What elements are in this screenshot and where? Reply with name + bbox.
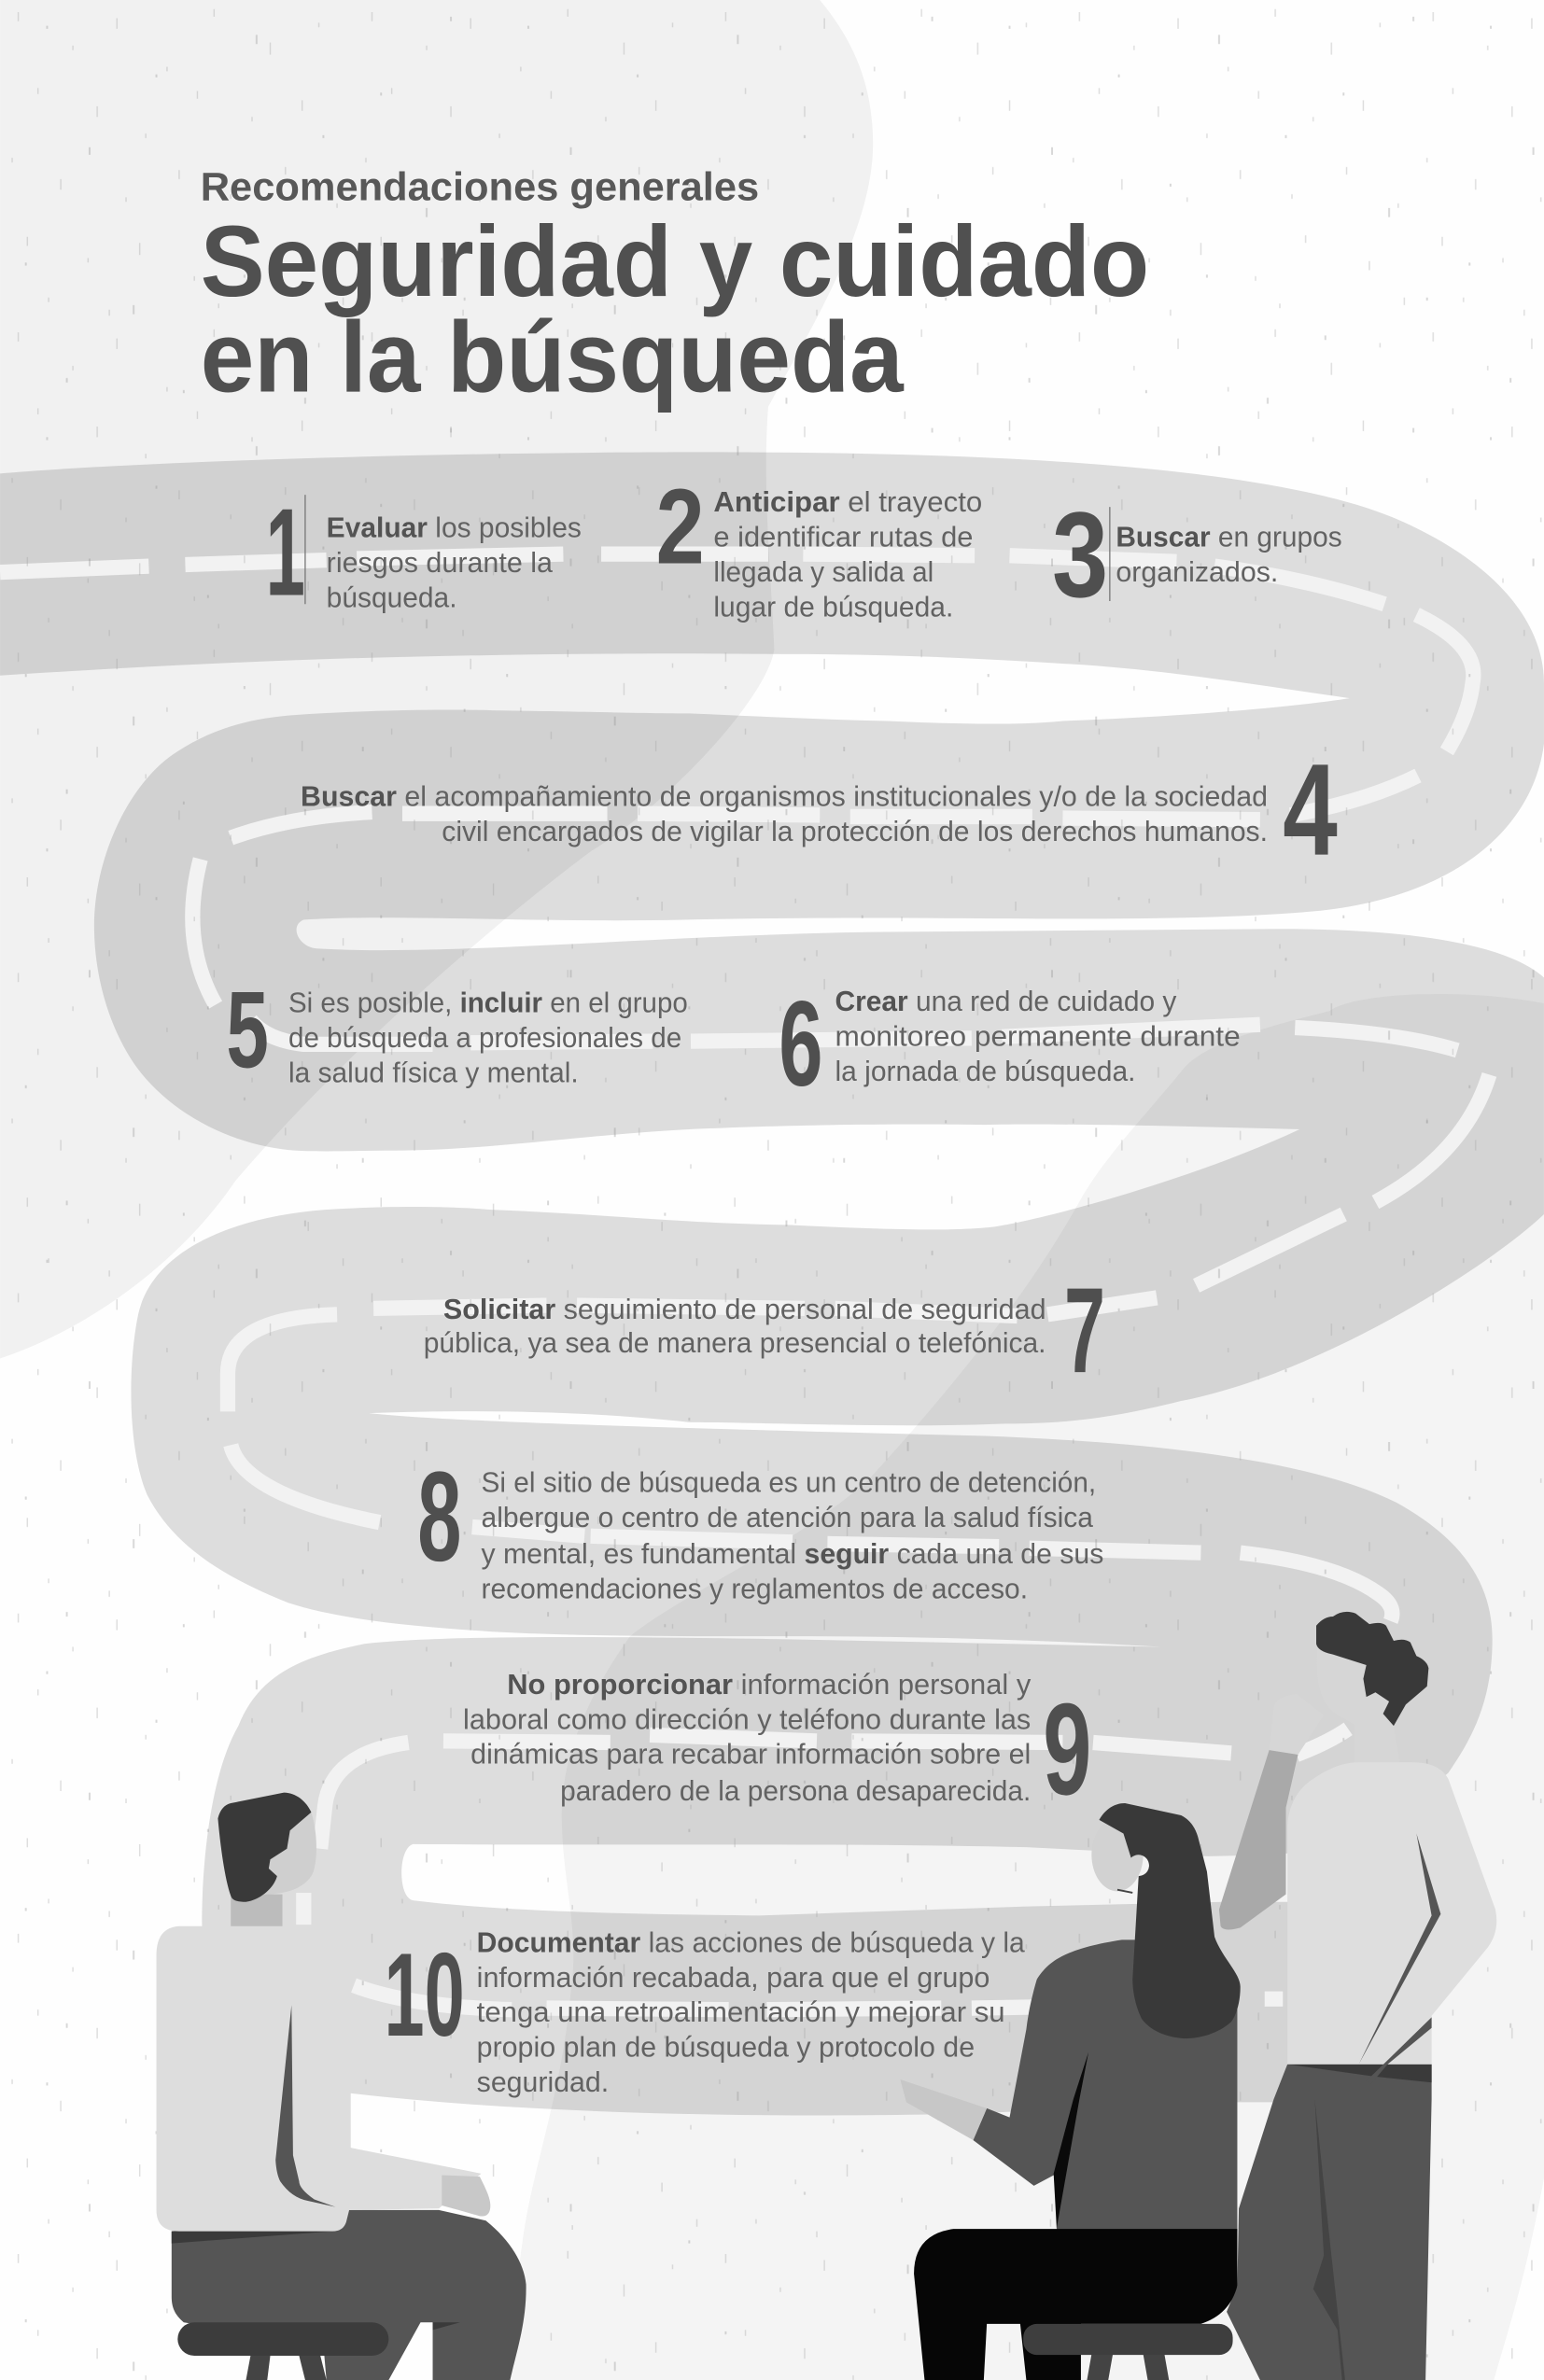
stool legs <box>1087 2354 1169 2380</box>
text 2: llegada y salida al <box>713 557 933 588</box>
number 4: 4 <box>1283 736 1338 883</box>
text 3 <box>1116 522 1342 588</box>
text 5: la salud física y mental. <box>288 1058 579 1089</box>
text 8: y mental, es fundamental seguir cada una de sus <box>482 1539 1103 1570</box>
text 6: monitoreo permanente durante <box>835 1022 1241 1053</box>
trousers <box>914 2229 1237 2380</box>
text 8: Si el sitio de búsqueda es un centro de detención, <box>482 1468 1096 1499</box>
hair <box>1316 1612 1428 1726</box>
number 10: 10 <box>384 1928 465 2061</box>
text 1: riesgos durante la <box>327 548 553 579</box>
hair <box>218 1793 311 1902</box>
text 3: organizados. <box>1116 557 1278 588</box>
blouse crease <box>1054 2052 1088 2228</box>
road centre dashes <box>0 554 1489 2009</box>
hair <box>1099 1803 1241 2038</box>
text 2: e identificar rutas de <box>713 522 973 553</box>
step 2 <box>656 468 982 623</box>
text 10: seguridad. <box>477 2067 609 2098</box>
hand <box>442 2175 490 2217</box>
text 8: recomendaciones y reglamentos de acceso. <box>482 1574 1028 1604</box>
text 9: No proporcionar información personal y <box>507 1670 1031 1701</box>
shirt <box>157 1926 482 2232</box>
main title: en la búsqueda <box>201 301 905 413</box>
winding road <box>0 452 1544 2115</box>
text 5 <box>288 988 688 1089</box>
number 5: 5 <box>226 968 269 1090</box>
text 10: información recabada, para que el grupo <box>477 1963 990 1994</box>
neck <box>231 1895 283 1927</box>
text 5: Si es posible, incluir en el grupo <box>288 988 688 1019</box>
step 3 <box>1052 486 1342 623</box>
face <box>261 1813 316 1895</box>
blouse <box>973 1939 1237 2232</box>
text 2: lugar de búsqueda. <box>713 592 953 623</box>
text 4 <box>301 782 1268 847</box>
step 8 <box>417 1445 1103 1604</box>
belt shadow <box>172 2232 460 2330</box>
text 6 <box>835 987 1241 1087</box>
shirt <box>1287 1762 1496 2065</box>
raised hand <box>1270 1694 1324 1755</box>
mouth <box>1117 1890 1132 1893</box>
number 8: 8 <box>417 1445 461 1588</box>
background blob: lower right <box>502 994 1544 2380</box>
hand <box>900 2079 987 2140</box>
heading block <box>201 165 1149 413</box>
trouser fold <box>1313 2099 1345 2380</box>
trousers <box>172 2210 526 2380</box>
text 1: Evaluar los posibles <box>327 513 582 544</box>
text 1: búsqueda. <box>327 583 457 614</box>
text 9: paradero de la persona desaparecida. <box>560 1776 1031 1807</box>
person: seated man on the left <box>157 1793 526 2380</box>
number 2: 2 <box>656 468 705 586</box>
step 4 <box>301 736 1338 883</box>
belt <box>1287 2065 1432 2082</box>
stool legs <box>246 2356 327 2380</box>
shirt crease and pocket arm <box>1359 1834 1440 2084</box>
number 1: 1 <box>266 483 305 622</box>
trousers <box>1227 2065 1432 2380</box>
text 9: dinámicas para recabar información sobre el <box>470 1740 1031 1771</box>
main title <box>201 205 1149 413</box>
stool seat <box>1023 2324 1233 2355</box>
step 6 <box>779 975 1241 1112</box>
step 9 <box>463 1670 1091 1822</box>
text 3: Buscar en grupos <box>1116 522 1342 553</box>
person: standing man on the right <box>1219 1612 1496 2380</box>
text 8: albergue o centro de atención para la salud física <box>482 1503 1093 1533</box>
step 1 <box>266 483 582 622</box>
person: seated woman in the centre <box>900 1803 1241 2380</box>
text 7: Solicitar seguimiento de personal de seguridad <box>443 1295 1046 1325</box>
text 8 <box>482 1468 1103 1604</box>
text 6: Crear una red de cuidado y <box>835 987 1176 1017</box>
face <box>1091 1818 1144 1891</box>
text 10: propio plan de búsqueda y protocolo de <box>477 2033 975 2064</box>
head <box>1317 1643 1399 1764</box>
text 1 <box>327 513 582 614</box>
step 10 <box>384 1927 1025 2098</box>
number 7: 7 <box>1064 1262 1105 1398</box>
kicker: Recomendaciones generales <box>201 165 759 209</box>
stool seat <box>177 2322 388 2356</box>
text 2: Anticipar el trayecto <box>713 487 982 518</box>
text 9: laboral como dirección y teléfono durante las <box>463 1704 1031 1735</box>
text 9 <box>463 1670 1031 1807</box>
main title: Seguridad y cuidado <box>201 205 1149 317</box>
text 5: de búsqueda a profesionales de <box>288 1023 681 1054</box>
text 10: Documentar las acciones de búsqueda y la <box>477 1927 1025 1958</box>
text 4: Buscar el acompañamiento de organismos institucionales y/o de la sociedad <box>301 782 1268 813</box>
raised arm <box>1219 1750 1298 1929</box>
text 2 <box>713 487 982 623</box>
text 4: civil encargados de vigilar la protección de los derechos humanos. <box>442 817 1268 847</box>
number 6: 6 <box>779 975 822 1112</box>
text 10 <box>477 1927 1025 2098</box>
number 3: 3 <box>1052 486 1108 623</box>
step 5 <box>226 968 688 1090</box>
step 7 <box>424 1262 1105 1398</box>
number 9: 9 <box>1043 1675 1091 1822</box>
shirt crease <box>275 2005 335 2207</box>
background blob: upper left <box>0 0 873 1359</box>
text 6: la jornada de búsqueda. <box>835 1057 1135 1087</box>
text 10: tenga una retroalimentación y mejorar su <box>477 1997 1005 2028</box>
text 7: pública, ya sea de manera presencial o telefónica. <box>424 1328 1046 1359</box>
text 7 <box>424 1295 1046 1359</box>
